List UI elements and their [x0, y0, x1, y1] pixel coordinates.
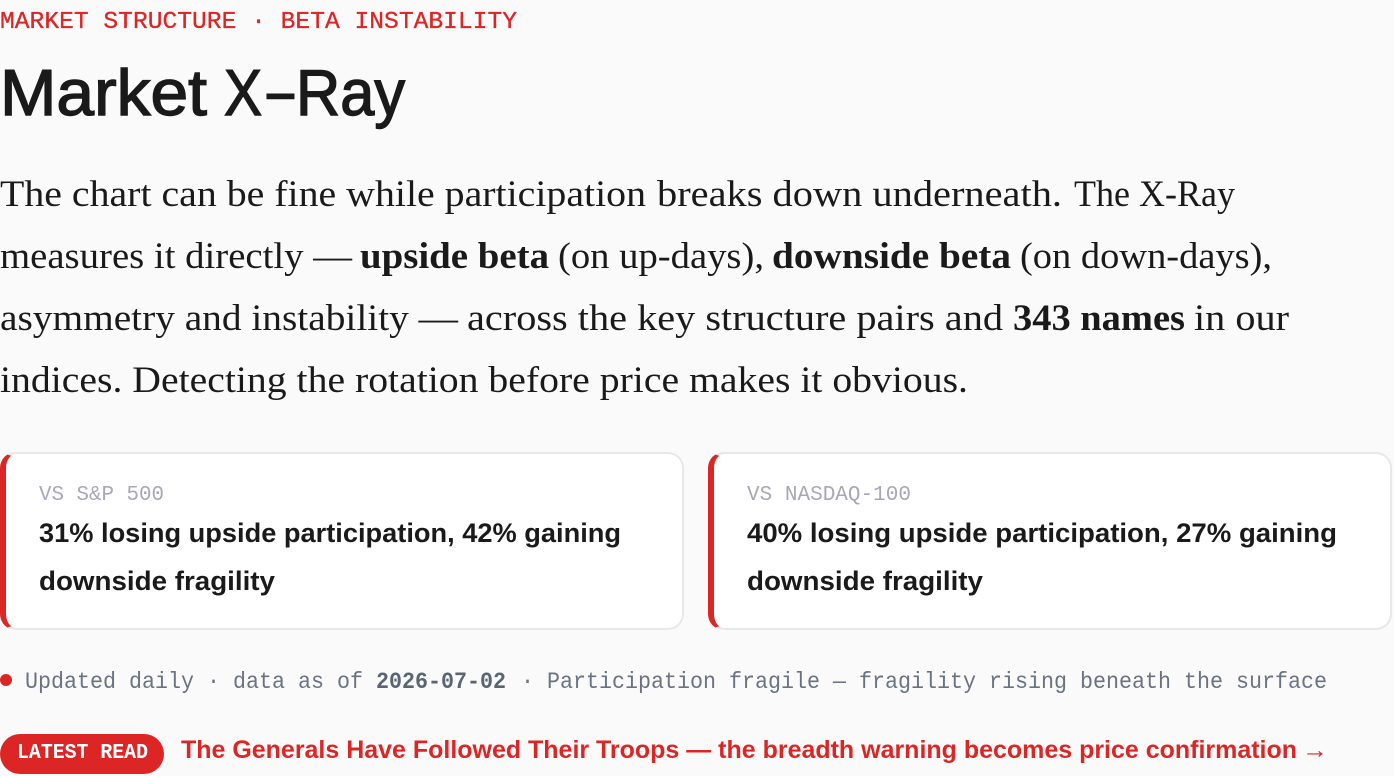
title: Market	[0, 56, 207, 129]
intro paragraph: The X-Ray	[1074, 174, 1235, 215]
intro paragraph	[0, 174, 1289, 401]
intro paragraph: across the key structure pairs and	[467, 298, 1004, 339]
panel: vs Nasdaq-100	[708, 452, 1392, 630]
title: Ray	[296, 56, 405, 129]
intro paragraph: in our	[1194, 298, 1289, 339]
latest read link: →	[1302, 736, 1328, 764]
title: X	[224, 56, 262, 129]
card statement: 40% losing upside participation, 27% gaining	[747, 518, 1337, 548]
card statement: 31% losing upside participation, 42% gaining	[39, 518, 621, 548]
card text	[39, 484, 621, 596]
card text	[747, 484, 1337, 596]
intro paragraph: downside beta	[772, 236, 1011, 277]
card background	[708, 452, 1392, 630]
header text	[0, 9, 1289, 401]
card statement: downside fragility	[747, 566, 983, 596]
intro paragraph: upside beta	[360, 236, 549, 277]
status line: Updated daily · data as of	[25, 669, 363, 695]
latest read badge: LATEST READ	[17, 742, 148, 765]
intro paragraph: 343 names	[1013, 298, 1185, 339]
eyebrow: MARKET STRUCTURE · BETA INSTABILITY	[0, 9, 517, 36]
card label: VS S&P 500	[39, 484, 164, 507]
status line	[25, 669, 1327, 695]
intro paragraph: indices. Detecting the rotation before price makes it obvious.	[0, 360, 968, 401]
intro paragraph: (on up-days),	[558, 236, 764, 277]
intro paragraph: breaks down underneath.	[657, 174, 1062, 215]
status line: · Participation fragile — fragility rising beneath the surface	[521, 669, 1327, 695]
status line: 2026-07-02	[376, 669, 506, 695]
card label: VS NASDAQ-100	[747, 484, 911, 507]
status and latest read	[0, 669, 1328, 774]
intro paragraph: The chart can be fine while participation	[0, 174, 646, 215]
title	[0, 54, 405, 129]
intro paragraph: measures it directly —	[0, 236, 353, 277]
latest read link: The Generals Have Followed Their Troops — the breadth warning becomes price confirmation	[181, 736, 1297, 764]
panel: vs S&P 500	[0, 452, 684, 630]
intro paragraph: (on down-days),	[1020, 236, 1272, 277]
card statement	[39, 518, 621, 596]
latest read badge	[0, 734, 164, 774]
intro paragraph: asymmetry and instability —	[0, 298, 459, 339]
card background	[0, 452, 684, 630]
status dot	[0, 674, 12, 686]
card statement	[747, 518, 1337, 596]
card statement: downside fragility	[39, 566, 275, 596]
title: –	[267, 54, 295, 127]
